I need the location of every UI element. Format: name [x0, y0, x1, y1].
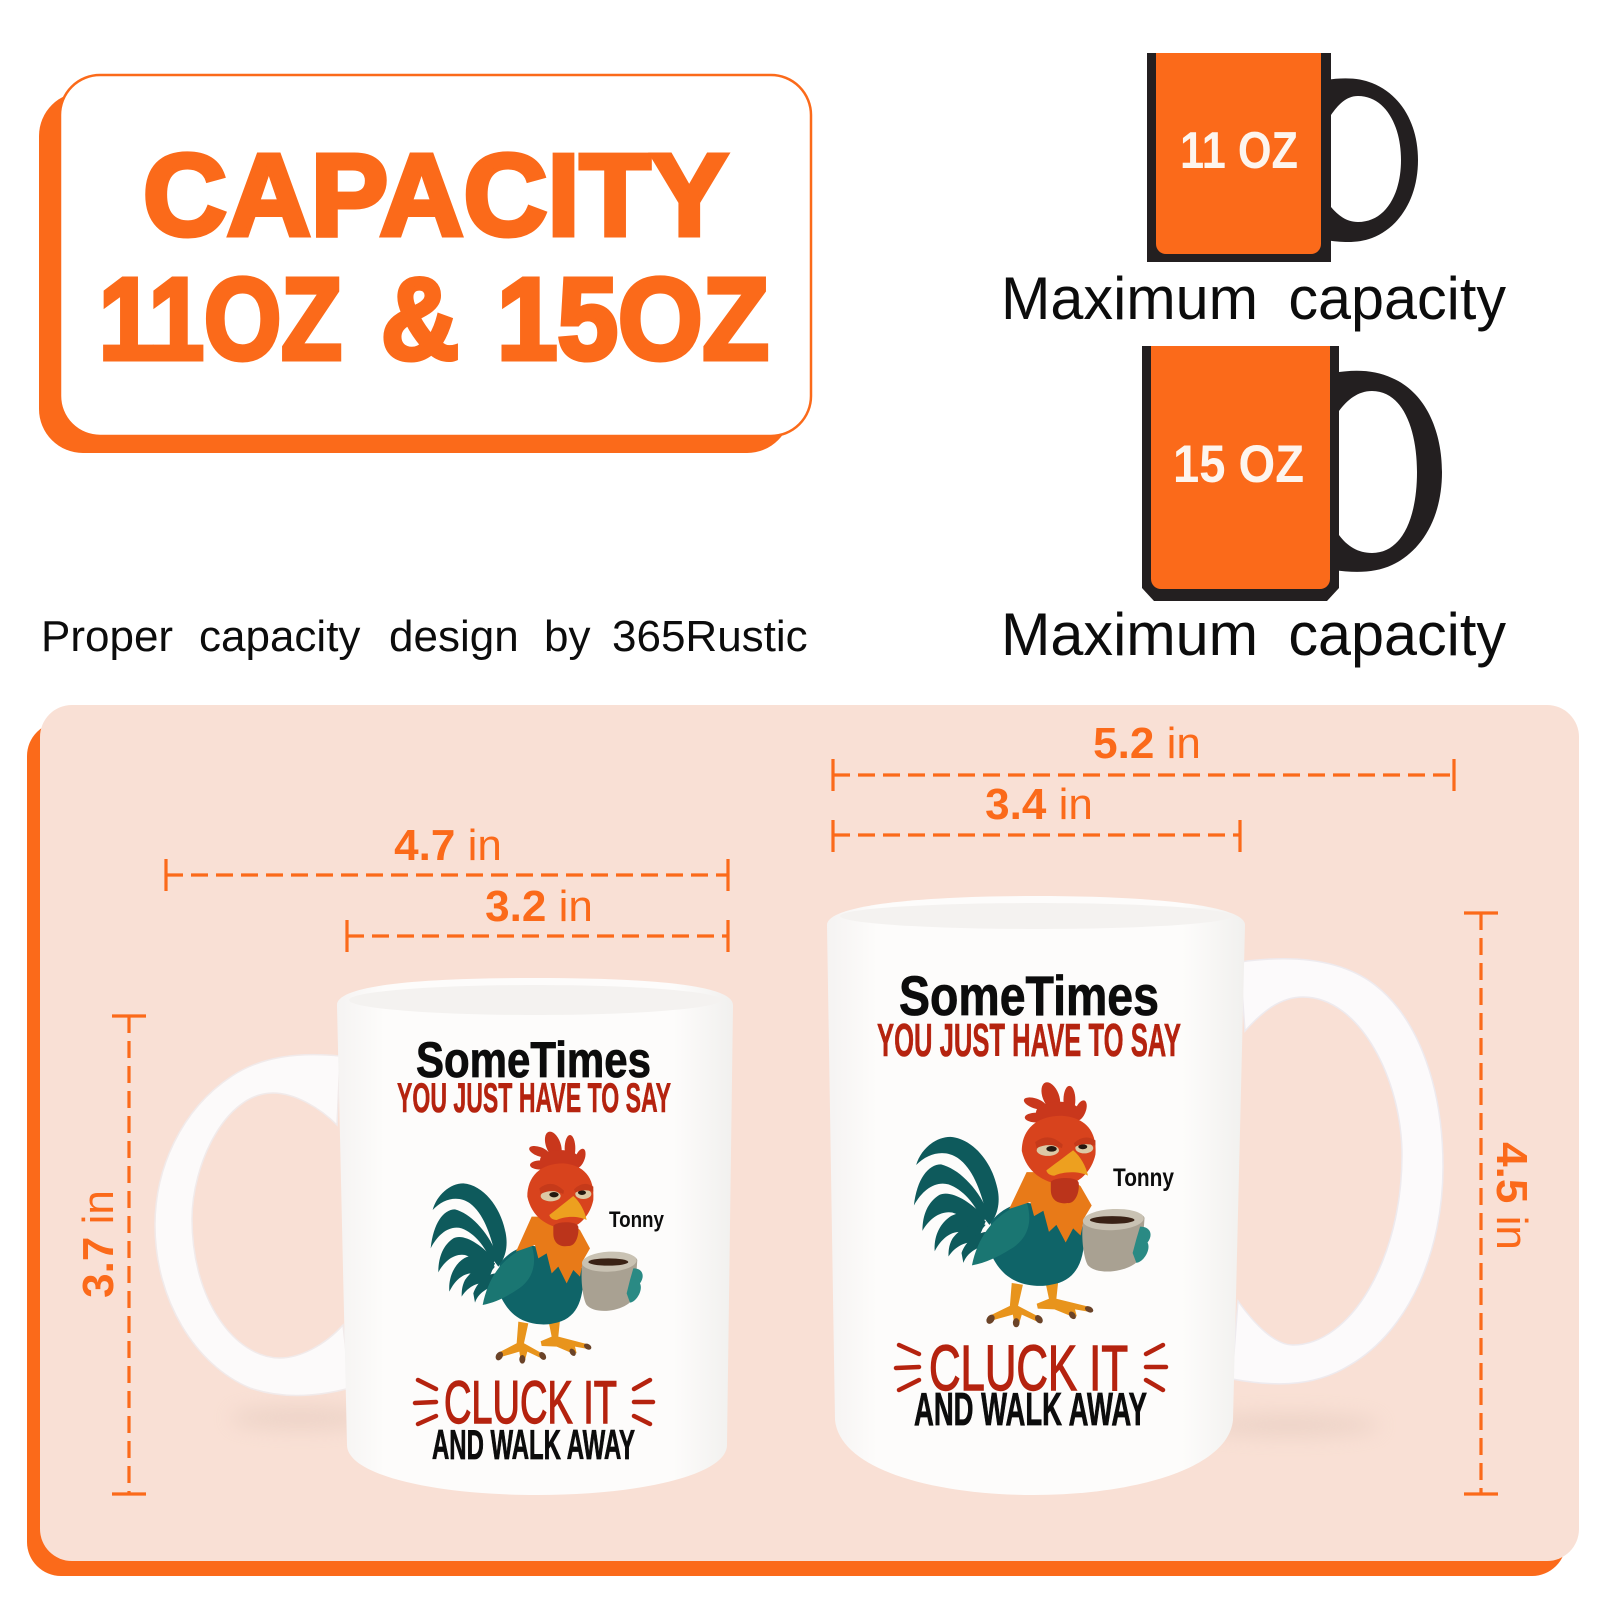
dimension: 4.5 in height: 4.5 in — [1487, 1142, 1536, 1250]
dimension: 3.4 in width — [833, 780, 1240, 852]
label: 15 OZ: 15 OZ — [1173, 435, 1304, 494]
mug rays: right — [634, 1380, 653, 1424]
mug text: you just have to say: YOU JUST HAVE TO SAY — [877, 1014, 1181, 1066]
label: 11 OZ: 11 OZ — [1180, 122, 1298, 180]
mug text: you just have to say: YOU JUST HAVE TO SAY — [397, 1074, 671, 1121]
dimension: 3.4 in width: 3.4 in — [985, 780, 1093, 829]
mug body — [337, 978, 733, 1495]
mug text: tonny: Tonny — [1113, 1164, 1174, 1192]
caption: maximum capacity 11 oz: Maximum capacity — [1001, 265, 1506, 332]
dimension: 3.2 in width — [347, 882, 728, 952]
caption: proper capacity: Proper — [41, 612, 173, 661]
mug text: and walk away: AND WALK AWAY — [432, 1421, 635, 1468]
mug text: cluck it: CLUCK IT — [444, 1369, 617, 1436]
mug inner rim — [349, 985, 721, 1015]
icon: rooster with coffee — [431, 1129, 643, 1364]
mug rays: right — [1146, 1345, 1166, 1390]
caption: proper capacity: by — [544, 612, 590, 661]
caption: proper capacity: design — [389, 612, 519, 661]
dimension: 3.7 in height — [74, 1016, 146, 1494]
dimension: 4.5 in height — [1464, 913, 1536, 1494]
dimension: 5.2 in width: 5.2 in — [1093, 719, 1201, 768]
mug text: and walk away: AND WALK AWAY — [914, 1383, 1147, 1435]
mug handle — [155, 1055, 350, 1396]
mug text: sometimes: SomeTimes — [899, 964, 1159, 1027]
title line 1: CAPACITY — [143, 130, 728, 260]
caption: proper capacity: 365Rustic — [612, 612, 808, 661]
mug text: tonny: Tonny — [609, 1207, 665, 1232]
panel: mug dimensions — [27, 705, 1579, 1576]
panel background — [40, 705, 1579, 1561]
icon: 11 oz mug — [1147, 53, 1418, 262]
dimension: 4.7 in width — [166, 821, 728, 891]
icon: rooster with coffee — [914, 1080, 1151, 1327]
panel: capacity title — [39, 75, 811, 453]
title line 2 — [99, 254, 769, 384]
photo: 15 oz mug — [827, 896, 1443, 1495]
panel shadow — [27, 722, 1566, 1576]
photo: 11 oz mug — [155, 978, 733, 1495]
title card shadow — [39, 92, 791, 453]
caption: proper capacity: capacity — [199, 612, 360, 661]
mug text: cluck it: CLUCK IT — [929, 1332, 1128, 1404]
icon: 15 oz mug — [1142, 346, 1442, 601]
title card — [60, 75, 811, 436]
dimension: 5.2 in width — [833, 719, 1454, 791]
title line 2: & — [381, 254, 459, 384]
dimension: 3.2 in width: 3.2 in — [485, 882, 593, 931]
mug shadows — [230, 1407, 1380, 1436]
title line 2: 11OZ — [99, 254, 342, 384]
mug rays: left — [896, 1345, 919, 1390]
caption: maximum capacity 15 oz: Maximum capacity — [1001, 601, 1506, 668]
mug rays: left — [415, 1380, 436, 1424]
mug body — [827, 896, 1245, 1495]
dimension: 3.7 in height: 3.7 in — [74, 1190, 123, 1298]
mug inner rim — [840, 903, 1232, 929]
mug handle — [1232, 959, 1443, 1384]
mug text: sometimes: SomeTimes — [416, 1032, 651, 1088]
title line 2: 15OZ — [497, 254, 769, 384]
dimension: 4.7 in width: 4.7 in — [394, 821, 502, 870]
